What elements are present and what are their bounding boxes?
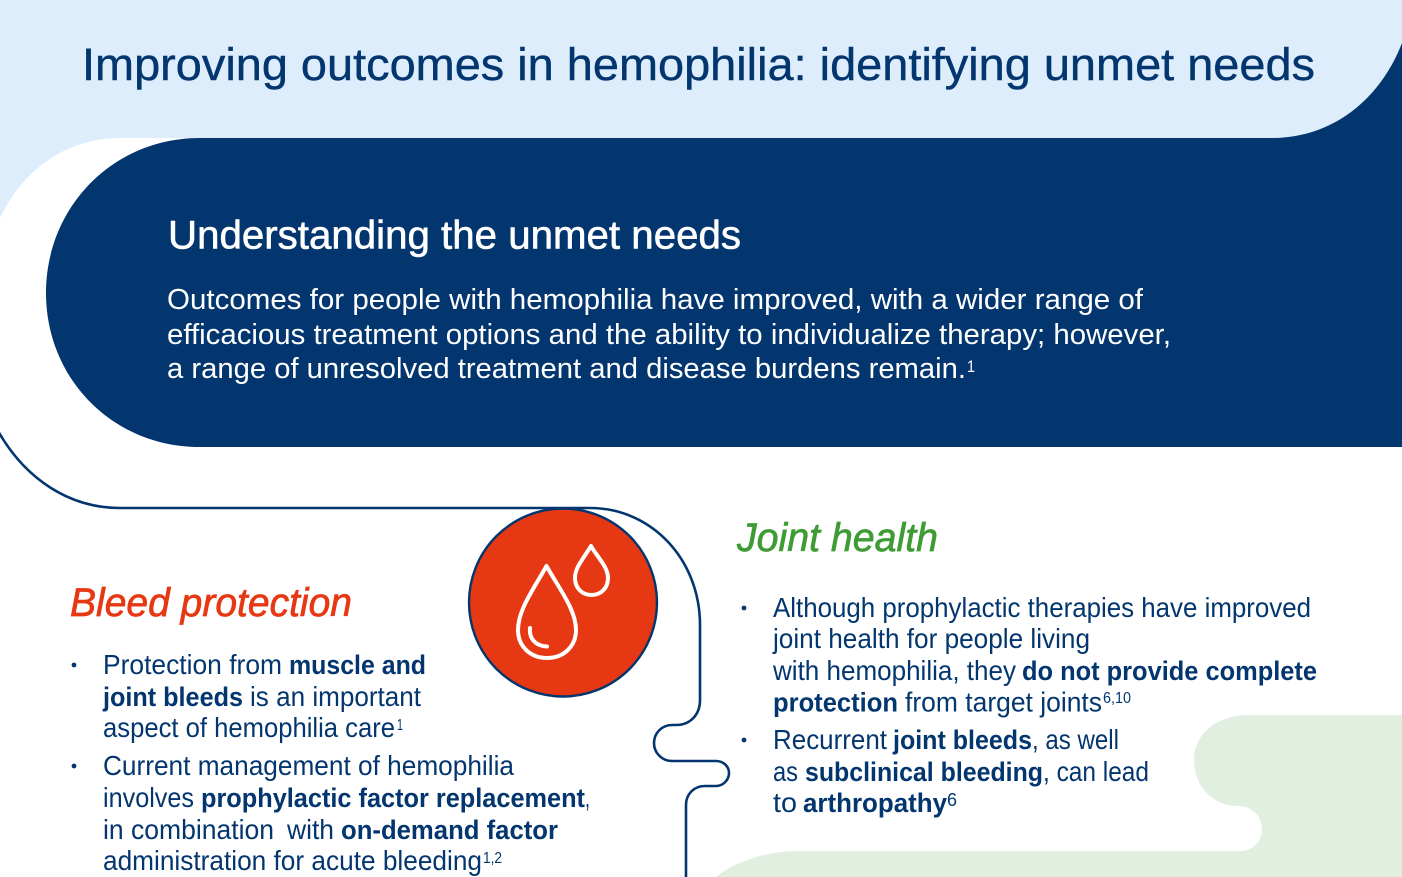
bullet: muscle and joint bleeds — [72, 649, 426, 743]
heading: bleed protection: Bleed protection — [70, 581, 352, 625]
bullet: muscle and joint bleeds: is an important — [250, 681, 421, 712]
bullet: current management: Current management of hemophilia — [103, 750, 514, 781]
icon: blood drops — [469, 508, 657, 696]
bullet: recurrent joint bleeds: subclinical bleeding — [805, 757, 1043, 787]
text block: unmet needs summary: 1 — [967, 357, 975, 376]
bullet: recurrent joint bleeds — [742, 724, 1149, 818]
bullet: prophylactic therapies: with hemophilia, they — [772, 655, 1016, 686]
bullet: current management: on-demand factor — [341, 815, 558, 845]
bullet: prophylactic therapies: Although prophylactic therapies have improved — [773, 592, 1311, 623]
connector line — [0, 431, 729, 877]
title: Improving outcomes in hemophilia: identifying unmet needs — [82, 39, 1315, 90]
bullet: muscle and joint bleeds: 1 — [397, 717, 403, 734]
bullet: muscle and joint bleeds: Protection from — [103, 649, 282, 680]
bullet: recurrent joint bleeds: to — [773, 787, 797, 818]
text block: unmet needs summary: a range of unresolved treatment and disease burdens remain. — [167, 353, 966, 385]
bullet: current management: in combination — [103, 814, 274, 845]
bullet: prophylactic therapies: from target joints — [905, 686, 1102, 718]
panel: understanding the unmet needs — [46, 30, 1402, 447]
bullet: recurrent joint bleeds: , can lead — [1043, 756, 1149, 787]
text block: unmet needs summary: efficacious treatment options and the ability to individualize therapy; however, — [167, 319, 1171, 351]
green background shapes — [716, 715, 1402, 877]
bullet: recurrent joint bleeds: Recurrent — [773, 724, 887, 755]
text block: unmet needs summary — [167, 284, 1171, 385]
bullet: recurrent joint bleeds: 6 — [947, 790, 957, 810]
bullet: current management: , — [585, 782, 590, 813]
bullet: current management — [72, 750, 590, 876]
bullet: muscle and joint bleeds: aspect of hemophilia care — [103, 712, 395, 743]
bullet: prophylactic therapies: do not provide complete — [1022, 656, 1317, 686]
bullet: prophylactic therapies — [742, 592, 1317, 718]
bullet: current management: involves — [103, 782, 194, 813]
bullet: current management: prophylactic factor replacement — [201, 783, 585, 813]
bullet: recurrent joint bleeds: arthropathy — [803, 788, 947, 818]
bullet: recurrent joint bleeds: , as well — [1032, 724, 1119, 755]
bullet: muscle and joint bleeds: joint bleeds — [102, 682, 243, 712]
panel: bleed protection — [70, 581, 590, 876]
text block: unmet needs summary: Outcomes for people with hemophilia have improved, with a wider range of — [167, 284, 1144, 316]
title banner — [0, 0, 1402, 218]
heading: understanding the unmet needs: Understanding the unmet needs — [168, 214, 741, 258]
bullet: muscle and joint bleeds: muscle and — [289, 650, 426, 680]
panel: joint health — [736, 516, 1317, 818]
heading: joint health: Joint health — [736, 516, 938, 560]
bullet: current management: administration for acute bleeding — [103, 845, 482, 876]
bullet: recurrent joint bleeds: as — [773, 756, 798, 787]
bullet: prophylactic therapies: protection — [773, 688, 898, 718]
bullet: prophylactic therapies: 6,10 — [1103, 690, 1131, 707]
bullet: current management: with — [286, 814, 334, 845]
bullet: current management: 1,2 — [483, 850, 502, 867]
bullet: recurrent joint bleeds: joint bleeds — [892, 725, 1032, 755]
bullet: prophylactic therapies: joint health for people living — [772, 623, 1090, 654]
